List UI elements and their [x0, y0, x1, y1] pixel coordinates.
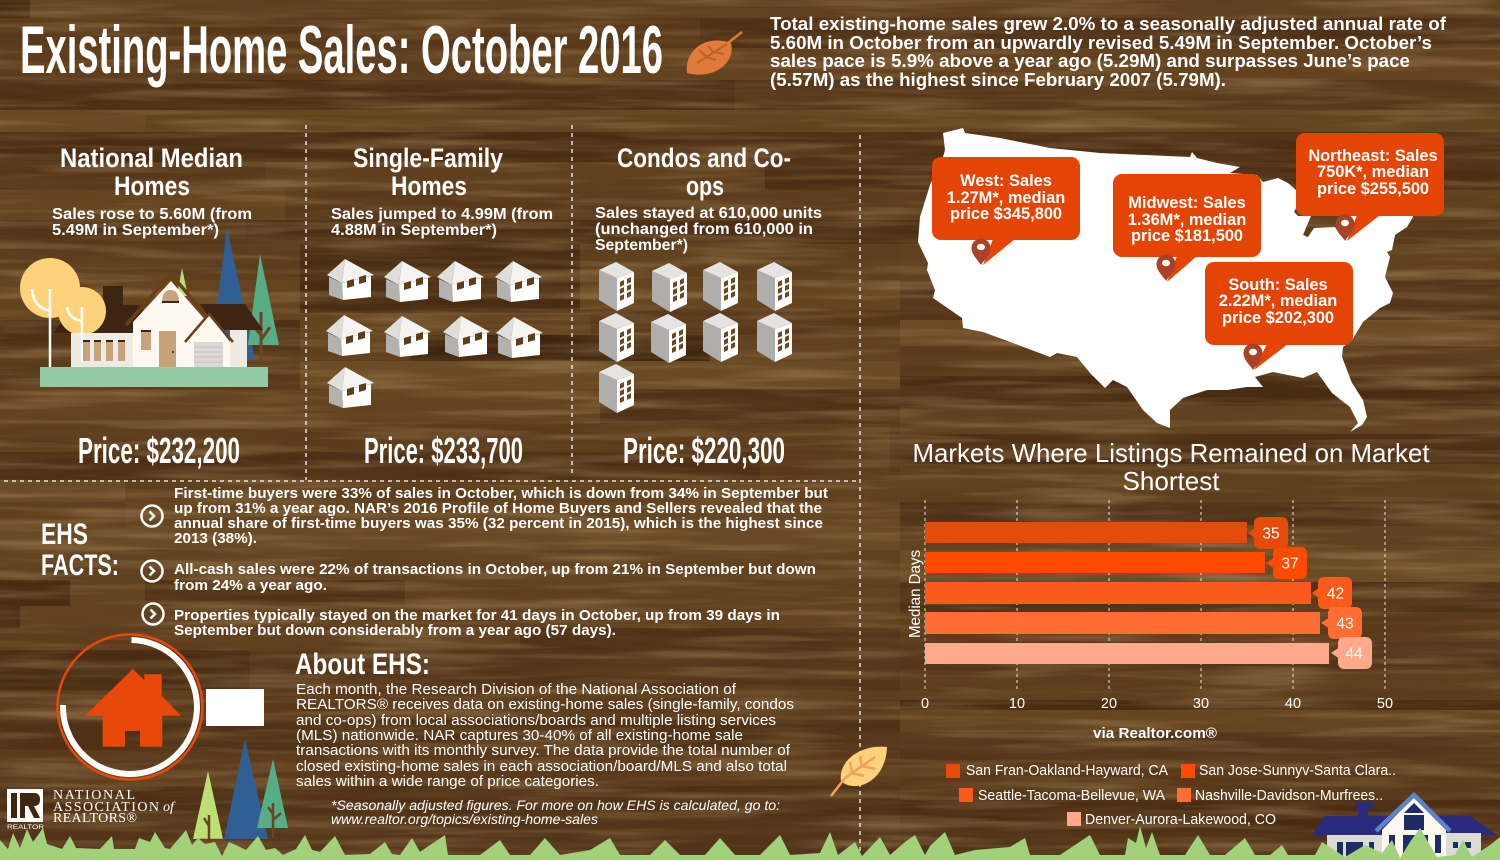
text: condos sales — [595, 205, 822, 254]
intro text: Total existing-home sales grew 2.0% to a seasonally adjusted annual rate of — [770, 14, 1447, 34]
body: about EHS: and co-ops) from local associations/boards and multiple listing services — [296, 713, 776, 729]
icons: nine buildings — [599, 262, 792, 413]
intro text: sales pace is 5.9% above a year ago (5.29M) and surpasses June’s pace — [770, 51, 1410, 71]
text: single-family sales — [331, 206, 553, 239]
heading: single-family homes — [353, 143, 503, 201]
body: about EHS: sales within a wide range of price categories. — [296, 774, 599, 790]
x axis labels — [921, 696, 1393, 712]
text: fact 1: annual share of first-time buyers was 35% (32 percent in 2015), which is the highest since — [174, 515, 823, 532]
callout: Northeast: Northeast: Sales — [1308, 147, 1438, 165]
panel: EHS facts — [41, 485, 828, 639]
text: fact 1: up from 31% a year ago. NAR’s 2016 Profile of Home Buyers and Sellers revealed that the — [174, 500, 822, 517]
callout: West: price $345,800 — [950, 205, 1062, 223]
icons: nine houses — [326, 259, 543, 408]
heading: national median homes: National Median — [60, 143, 243, 173]
price: national: Price: $232,200 — [78, 430, 240, 471]
body: about EHS — [296, 682, 794, 790]
text: condos sales: Sales stayed at 610,000 units — [595, 205, 822, 222]
white rectangle — [206, 689, 264, 726]
callout: South: South: Sales — [1228, 276, 1328, 294]
icon: yellow leaf — [831, 747, 887, 796]
logo: National Association of Realtors — [7, 788, 176, 831]
heading: condos and co-ops: ops — [686, 171, 724, 201]
bar: 44: 44 — [1345, 646, 1363, 662]
heading: EHS facts: EHS — [41, 518, 88, 551]
panel: condos and co-ops — [595, 143, 822, 471]
text: fact 1 — [174, 485, 828, 547]
illustration: house with trees — [20, 227, 279, 387]
dashed dividers — [4, 125, 860, 860]
axis label: Median Days — [907, 550, 924, 638]
text: fact 2: All-cash sales were 22% of transactions in October, up from 21% in September but down — [174, 561, 816, 578]
heading: condos and co-ops: Condos and Co- — [617, 143, 791, 173]
callout: West: 1.27M*, median — [947, 189, 1065, 207]
callout: Northeast: 750K*, median — [1317, 163, 1429, 181]
text: fact 3 — [174, 607, 780, 639]
legend: Nashville-Davidson-Murfrees.. — [1195, 788, 1383, 804]
callout: Northeast — [1296, 133, 1444, 241]
callout: South: price $202,300 — [1222, 309, 1334, 327]
body: about EHS: (MLS) nationwide. NAR captures 30-40% of all existing-home sale — [296, 728, 743, 744]
source line: via Realtor.com® — [1093, 726, 1217, 742]
footnote: www.realtor.org/topics/existing-home-sales — [331, 811, 598, 827]
panel: national median homes — [20, 143, 279, 471]
logo: National Association of Realtors: of — [163, 800, 176, 815]
logo: National Association of Realtors: NATIONAL — [53, 788, 135, 803]
x axis labels: 40 — [1285, 696, 1301, 712]
map: contiguous United States — [918, 128, 1413, 432]
icon: chevron bullet 2 — [142, 560, 162, 582]
x axis labels: 0 — [921, 696, 929, 712]
legend: Seattle-Tacoma-Bellevue, WA — [978, 788, 1165, 804]
text: fact 3: Properties typically stayed on the market for 41 days in October, up from 39 days in — [174, 607, 780, 624]
icon: orange leaf — [687, 32, 742, 75]
bar: 35 — [925, 517, 1288, 549]
bar chart: median days — [907, 500, 1393, 712]
bar: 37: 37 — [1281, 556, 1299, 572]
price: condos: Price: $220,300 — [623, 430, 785, 471]
logo: National Association of Realtors: REALTOR — [7, 824, 44, 831]
text: fact 2 — [174, 561, 816, 594]
body: about EHS: REALTORS® receives data on existing-home sales (single-family, condos — [296, 697, 794, 713]
heading: condos and co-ops — [617, 143, 791, 201]
bar: 42 — [925, 577, 1352, 609]
callout: Midwest: Midwest: Sales — [1128, 194, 1246, 212]
heading: national median homes: Homes — [114, 171, 190, 201]
title: Existing-Home Sales: October 2016 — [20, 12, 663, 88]
text: national sales: 5.49M in September*) — [52, 222, 219, 239]
heading: national median homes — [60, 143, 243, 201]
legend: San Jose-Sunnyv-Santa Clara.. — [1199, 763, 1396, 779]
text: condos sales: (unchanged from 610,000 in — [595, 221, 813, 238]
legend: Denver-Aurora-Lakewood, CO — [1085, 812, 1276, 828]
x axis labels: 10 — [1009, 696, 1025, 712]
bar: 44 — [925, 637, 1372, 669]
illustration: blue house — [1312, 795, 1497, 860]
heading: single-family homes: Homes — [391, 171, 467, 201]
text: fact 1: First-time buyers were 33% of sales in October, which is down from 34% in September but — [174, 485, 828, 502]
callout: Midwest: price $181,500 — [1131, 227, 1243, 245]
text: fact 2: from 24% a year ago. — [174, 577, 327, 594]
legend: San Fran-Oakland-Hayward, CA — [966, 763, 1168, 779]
bar: 43: 43 — [1336, 616, 1354, 632]
icon: house in circle — [58, 634, 202, 780]
text: single-family sales: 4.88M in September*) — [331, 222, 497, 239]
icon: chevron bullet 3 — [142, 604, 164, 624]
legend — [946, 763, 1396, 828]
text: fact 3: September but down considerably from a year ago (57 days). — [174, 622, 616, 639]
text: national sales: Sales rose to 5.60M (from — [52, 206, 252, 223]
panel: single-family homes — [326, 143, 553, 471]
logo: National Association of Realtors: REALTORS® — [53, 811, 137, 826]
x axis labels: 30 — [1193, 696, 1209, 712]
icon: chevron bullet 1 — [142, 506, 162, 526]
text: fact 1: 2013 (38%). — [174, 530, 257, 547]
text: national sales — [52, 206, 252, 239]
bar: 43 — [925, 607, 1362, 639]
price: single-family: Price: $233,700 — [364, 430, 523, 471]
x axis labels: 20 — [1101, 696, 1117, 712]
callout: West — [932, 157, 1080, 265]
callout: Midwest: 1.36M*, median — [1128, 211, 1246, 229]
footnote: *Seasonally adjusted figures. For more on how EHS is calculated, go to: — [331, 797, 780, 813]
text: single-family sales: Sales jumped to 4.99M (from — [331, 206, 553, 223]
callout: West: West: Sales — [960, 172, 1052, 190]
chart title: Markets Where Listings Remained on Market — [912, 438, 1430, 468]
x axis labels: 50 — [1377, 696, 1393, 712]
heading: EHS facts — [41, 518, 119, 582]
callout: South: 2.22M*, median — [1219, 292, 1337, 310]
illustration: three trees — [193, 739, 288, 851]
bar: 35: 35 — [1262, 526, 1280, 542]
callout: South — [1205, 262, 1353, 370]
body: about EHS: closed existing-home sales in each association/board/MLS and also total — [296, 759, 787, 775]
intro text — [770, 14, 1447, 90]
chart title — [912, 438, 1430, 496]
grass — [0, 826, 1500, 860]
heading: single-family homes: Single-Family — [353, 143, 503, 173]
chart title: Shortest — [1122, 466, 1220, 496]
callout: Northeast: price $255,500 — [1317, 180, 1429, 198]
body: about EHS: Each month, the Research Division of the National Association of — [296, 682, 737, 698]
body: about EHS: transactions with its monthly survey. The data provide the total number of — [296, 743, 791, 759]
text: condos sales: September*) — [595, 237, 688, 254]
heading: EHS facts: FACTS: — [41, 549, 119, 582]
bar: 37 — [925, 547, 1307, 579]
intro text: 5.60M in October from an upwardly revised 5.49M in September. October’s — [770, 33, 1432, 53]
heading: about EHS: About EHS: — [295, 648, 430, 681]
bar: 42: 42 — [1327, 586, 1344, 602]
callout: Midwest — [1113, 174, 1261, 282]
logo: National Association of Realtors: ASSOCIATION — [53, 800, 159, 815]
intro text: (5.57M) as the highest since February 2007 (5.79M). — [770, 70, 1226, 90]
text block: about EHS — [295, 648, 794, 790]
footnote — [331, 797, 780, 827]
